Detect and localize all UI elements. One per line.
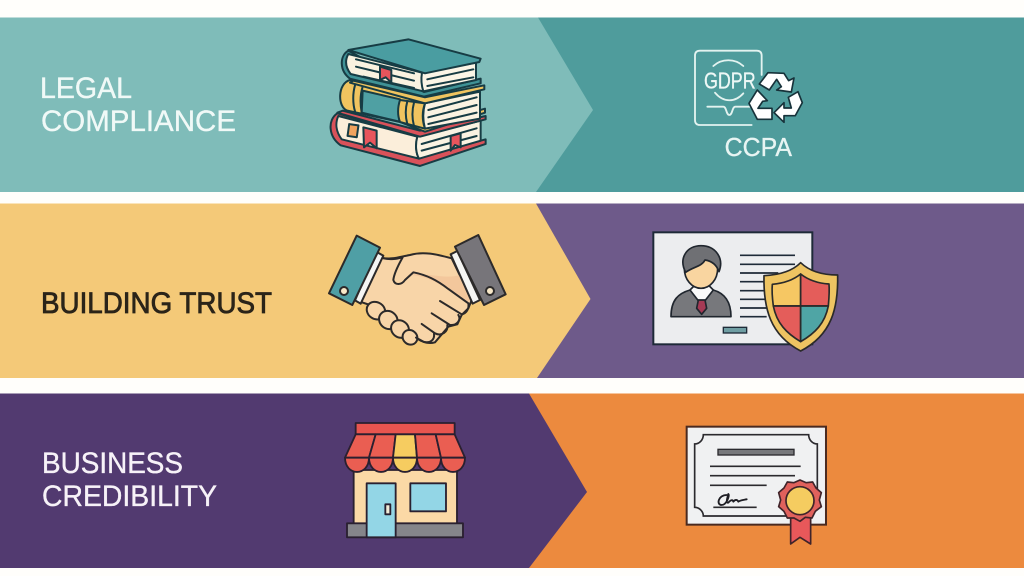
heading: business credibility: CREDIBILITY (42, 480, 217, 513)
signature (719, 494, 747, 505)
window (410, 483, 446, 511)
CCPA text: CCPA (725, 132, 793, 162)
button (723, 327, 747, 333)
title bar (718, 449, 794, 455)
arrow: business credibility chevron (0, 394, 587, 568)
heading: legal compliance (40, 72, 236, 138)
icon: ID card with shield (653, 232, 838, 351)
top book (342, 39, 481, 97)
heading: business credibility: BUSINESS (42, 447, 183, 480)
panel: building trust band (0, 204, 1024, 378)
GDPR text: GDPR (704, 68, 756, 94)
icon: GDPR document with recycling symbol and CCPA label (695, 51, 802, 162)
icon: stack of books (331, 39, 486, 166)
finger details (363, 298, 420, 348)
heading: legal compliance: LEGAL (40, 72, 132, 105)
door (367, 483, 396, 537)
card lines (740, 255, 795, 317)
hands (360, 253, 472, 343)
shield (764, 263, 838, 351)
panel: legal compliance band (0, 18, 1024, 192)
text lines (710, 466, 801, 507)
heading: business credibility (42, 447, 217, 513)
certificate sheet (687, 427, 826, 525)
icon: handshake (329, 235, 506, 348)
bottom book (331, 111, 486, 166)
recycling symbol (749, 73, 802, 122)
heading: legal compliance: COMPLIANCE (41, 105, 236, 138)
heading: building trust: BUILDING TRUST (41, 287, 272, 320)
awning (345, 423, 465, 472)
person (671, 246, 731, 317)
left cuff (355, 252, 383, 304)
middle book (340, 80, 485, 132)
right cuff (451, 251, 480, 304)
arrow: legal compliance chevron (0, 18, 593, 192)
arrow: building trust chevron (0, 204, 590, 378)
panel: business credibility band (0, 394, 1024, 568)
card (653, 232, 812, 344)
base (347, 523, 463, 537)
icon: certificate with seal (687, 427, 826, 544)
ribbon seal (779, 480, 821, 544)
inner border (695, 435, 817, 516)
document outline (695, 51, 762, 125)
building (354, 470, 457, 525)
icon: storefront (345, 423, 465, 537)
